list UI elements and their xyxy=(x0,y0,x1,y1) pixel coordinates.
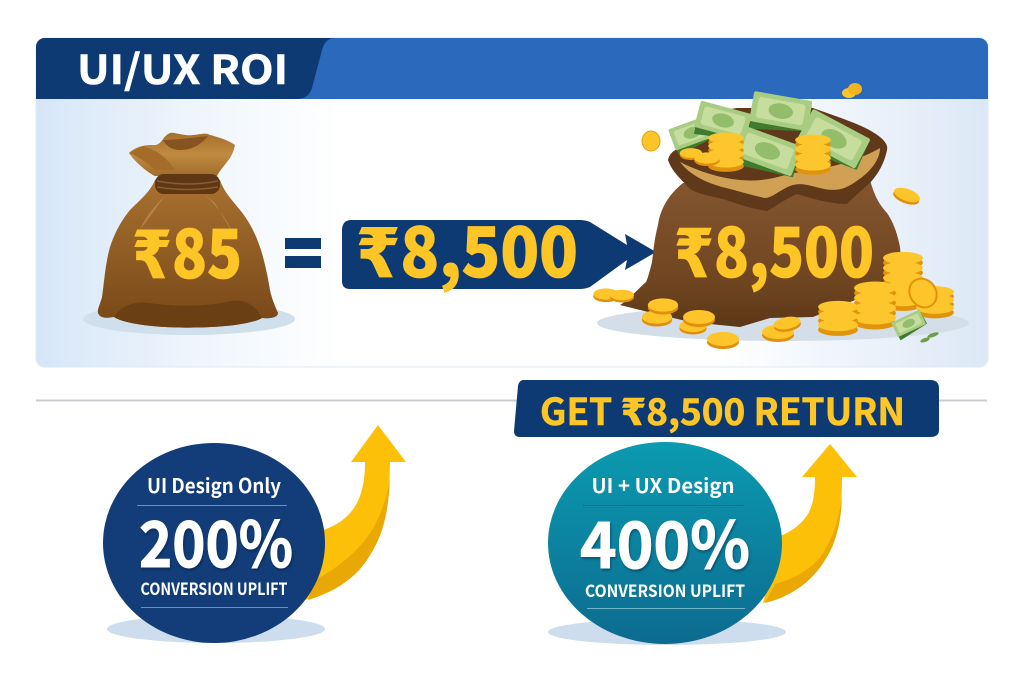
card: UI + UX Design xyxy=(548,442,857,645)
panel: top ROI panel xyxy=(36,38,988,367)
label: UI Design Only xyxy=(147,470,281,499)
caption: CONVERSION UPLIFT xyxy=(140,575,288,600)
card: UI Design Only xyxy=(103,425,406,643)
banner: get return: GET ₹8,500 RETURN xyxy=(540,382,905,436)
percentage: 200% xyxy=(139,495,293,586)
bag opening xyxy=(668,108,887,211)
arrow: growth xyxy=(763,444,857,603)
equals sign xyxy=(285,238,321,268)
right coin stacks xyxy=(883,252,923,311)
cash bundles xyxy=(668,114,720,156)
arrow: growth xyxy=(305,425,406,600)
bag collar xyxy=(680,148,880,198)
header tab xyxy=(36,38,334,99)
title: UI/UX ROI xyxy=(77,38,288,96)
icon: small money bag xyxy=(83,133,295,335)
left and bottom coins xyxy=(593,288,619,302)
value: ₹8,500 xyxy=(674,200,874,297)
header bar xyxy=(36,38,988,99)
coin stacks in bag xyxy=(708,132,744,172)
divider line xyxy=(36,400,987,402)
caption: CONVERSION UPLIFT xyxy=(585,577,745,602)
percentage: 400% xyxy=(580,495,750,587)
icon: large money bag with cash and coins xyxy=(593,83,969,349)
flying coins xyxy=(642,131,660,151)
bag body xyxy=(620,180,900,327)
arrow banner: 8,500: ₹8,500 xyxy=(356,198,578,297)
shadow xyxy=(548,619,786,645)
label: UI + UX Design xyxy=(592,470,734,499)
value: ₹85 xyxy=(132,202,242,298)
shadow xyxy=(107,615,325,643)
